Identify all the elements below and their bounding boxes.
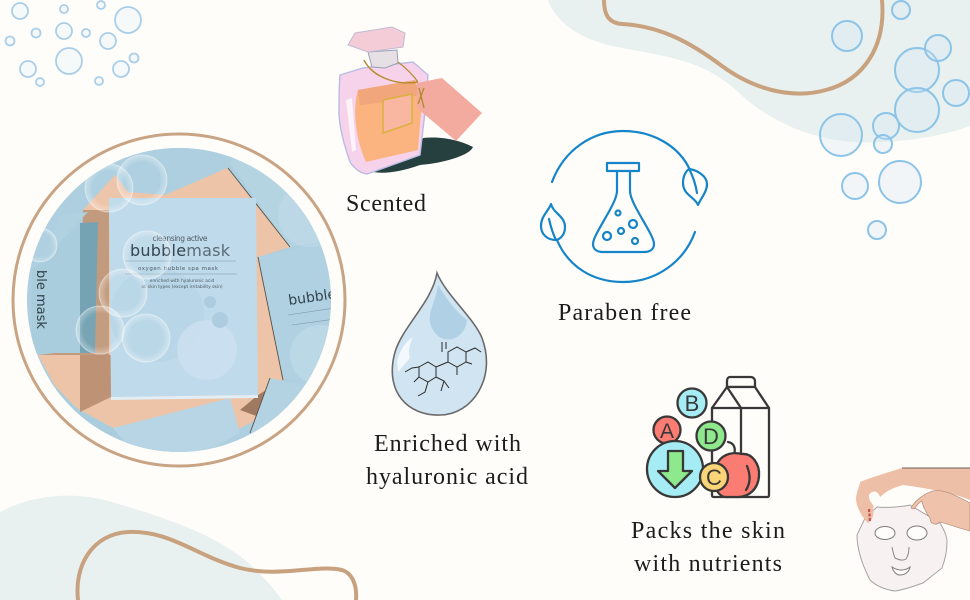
label: Packs the skin with nutrients xyxy=(631,518,785,577)
floating bubbles on photo xyxy=(23,155,171,362)
vitamin letters: B xyxy=(685,391,699,416)
product photo xyxy=(13,134,350,466)
icon: perfume bottle xyxy=(339,27,482,174)
bubbles: top left xyxy=(6,1,141,86)
photo: bubble mask packaging flat-lay: oxygen bubble spa mask xyxy=(138,266,219,272)
vitamin letters: D xyxy=(703,424,719,449)
photo ring xyxy=(13,134,345,466)
mask box xyxy=(109,198,258,397)
vitamin letters: C xyxy=(706,465,722,490)
label: Enriched with hyaluronic acid: hyaluronic acid xyxy=(366,464,528,490)
icon: hyaluronic acid water drop xyxy=(392,273,486,415)
peach card under the box xyxy=(80,168,300,432)
molecule diagram xyxy=(405,342,481,396)
background blob: bottom left xyxy=(0,496,282,600)
photo: bubble mask packaging flat-lay: enriched with hyaluronic acid xyxy=(150,278,215,284)
brown squiggle: top right xyxy=(604,0,882,94)
bubbles: top right xyxy=(820,1,969,239)
label: Scented: Scented xyxy=(346,191,426,217)
icon: nutrients carton, vitamins and apple xyxy=(647,377,769,497)
photo: bubble mask packaging flat-lay xyxy=(27,148,331,452)
label: Packs the skin with nutrients: Packs the skin xyxy=(631,518,785,544)
label: Paraben free: Paraben free xyxy=(558,300,691,326)
box text: cleansing active xyxy=(152,234,208,243)
vitamin letters: A xyxy=(660,420,674,443)
photo: bubble mask packaging flat-lay: all skin types (except irritability skin) xyxy=(141,284,223,290)
side sachet text: bubble xyxy=(287,286,337,309)
label: Enriched with hyaluronic acid: Enriched with xyxy=(374,431,521,457)
background blob: top right xyxy=(548,0,970,143)
photo: bubble mask packaging flat-lay: ble mask xyxy=(33,270,48,329)
label: Packs the skin with nutrients: with nutrients xyxy=(634,551,782,577)
brown squiggle: bottom left xyxy=(77,532,356,600)
icon: paraben free flask with leaves xyxy=(541,131,707,282)
label: Enriched with hyaluronic acid xyxy=(366,431,528,490)
icon: hands applying sheet mask xyxy=(856,468,970,591)
blue sachets around the box xyxy=(115,148,245,195)
vitamin letters xyxy=(660,391,722,490)
photo: bubble mask packaging flat-lay: bubblemask xyxy=(130,241,231,260)
